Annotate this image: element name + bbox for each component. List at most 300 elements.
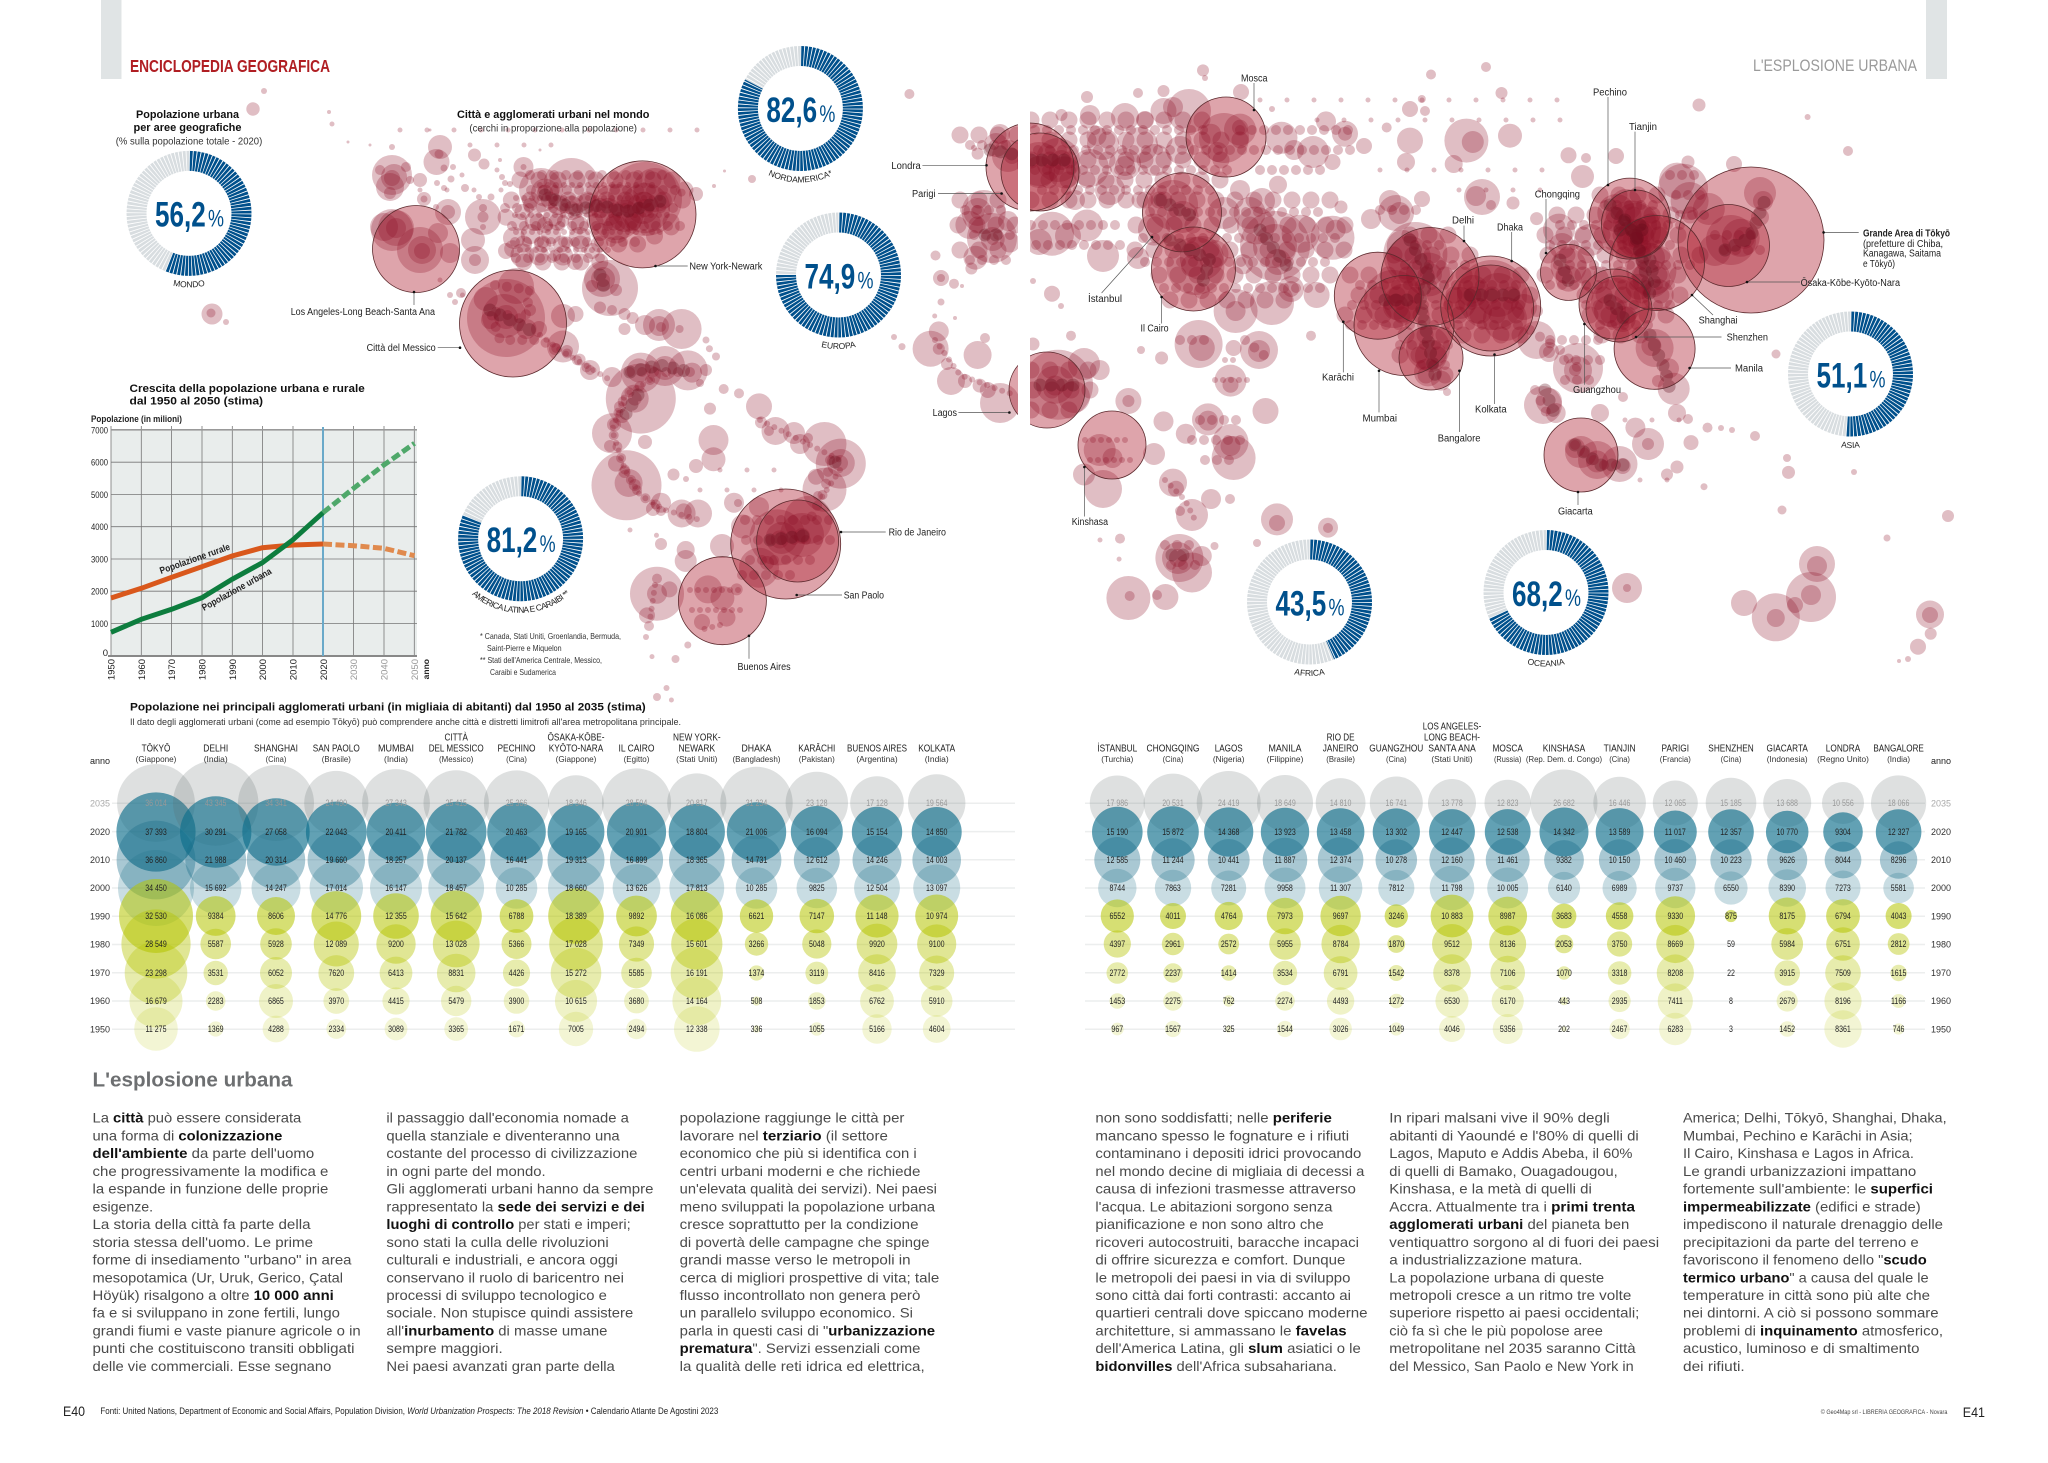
article heading: L'esplosione urbana [92,1070,293,1092]
column: Los Angeles-Long Beach-Santa Ana [1423,722,1481,1042]
header: Enciclopedia Geografica: ENCICLOPEDIA GEOGRAFICA [130,56,330,76]
y axis labels: 5000 [91,490,108,501]
text block: column 2: sempre maggiori. [386,1340,503,1356]
column: San Paolo [304,744,368,1039]
column: Giacarta: GIACARTA [1767,744,1808,754]
column: Londra: LONDRA [1826,744,1860,754]
credit footer: © Geo4Map srl - LIBRERIA GEOGRAFICA - Novara [1821,1408,1948,1416]
heading: Città e agglomerati urbani nel mondo: Città e agglomerati urbani nel mondo [457,109,650,121]
x axis labels: 2010 [288,659,300,680]
column: Pechino [484,744,549,1037]
label: Delhi [1452,216,1474,242]
y axis labels: 6000 [91,458,108,469]
chart title [130,383,365,408]
donut: Oceania 68,2% [1484,530,1608,666]
column: İstanbul: 6552 [1109,911,1126,921]
label: Kinshasa [1072,466,1108,528]
column: Città del Messico: 3365 [448,1024,465,1034]
column: Shanghai [238,744,314,1042]
text block: column 4: l'acqua. Le abitazioni sorgono senza [1095,1198,1333,1214]
column: Karāchi: 1853 [809,996,825,1006]
column: Manila: 13 923 [1274,827,1296,837]
text block: column 1 [92,1110,361,1374]
label: Grande Area di Tōkyō: Kanagawa, Saitama [1863,248,1941,260]
year axis: left: 2035 [90,798,110,808]
column: Londra: 9304 [1835,827,1851,837]
column: Chongqing: 2275 [1165,996,1181,1006]
text block: column 2: quella stanziale e diventeranno una [386,1127,620,1143]
column: Delhi: 30 291 [205,827,227,837]
column: Delhi: 2283 [208,996,224,1006]
text block: column 5: di quelli di Bamako, Ouagadougou, [1389,1163,1618,1179]
year axis: left: 1970 [90,968,110,978]
column: Chongqing: 15 872 [1162,827,1184,837]
column: Shenzhen: 59 [1727,939,1735,949]
text block: column 1: una forma di colonizzazione [92,1127,283,1143]
label: Il Cairo: Il Cairo [1140,324,1169,334]
column: İstanbul: 1453 [1109,996,1126,1006]
column: Buenos Aires: 15 154 [866,827,888,837]
column: Shanghai: 6052 [268,968,284,978]
column: Tōkyō: 32 530 [145,911,167,921]
column: Tianjin: 2467 [1612,1024,1628,1034]
page gutter [1018,0,1030,700]
column: Il Cairo: 16 899 [626,855,648,865]
column: Buenos Aires: 17 128 [866,798,888,808]
column: Parigi: 6283 [1667,1024,1684,1034]
column: Mosca: 11 461 [1497,855,1519,865]
footnotes: * Canada, Stati Uniti, Groenlandia, Bermuda, [480,631,621,641]
column: Shanghai: (Cina) [266,754,286,764]
column: San Paolo: (Brasile) [322,754,351,764]
column: San Paolo: 24 490 [326,798,348,808]
y axis labels [91,426,108,659]
column: Tianjin [1593,744,1646,1039]
line chart: urban and rural population growth [91,383,431,680]
column: Shenzhen: (Cina) [1721,754,1741,764]
column: Manila: 1544 [1277,1024,1293,1034]
column: Mumbai: 3089 [388,1024,404,1034]
label: Il Cairo [1140,296,1169,334]
column: Los Angeles-Long Beach-Santa Ana: 13 778 [1441,798,1463,808]
column: Kinshasa: 9382 [1556,855,1572,865]
heading: Popolazione urbana per aree geografiche [116,109,262,148]
text block: column 1: grandi fiumi e vaste pianure agricole o in [92,1322,361,1338]
column: Guangzhou: GUANGZHOU [1369,744,1423,754]
column: Manila: 7973 [1277,911,1293,921]
year axis: right [1931,756,1951,1034]
column: San Paolo: 22 043 [326,827,348,837]
column: Ōsaka-Kōbe-Kyōto-Nara: 7005 [568,1024,584,1034]
text block: column 3 [680,1110,940,1374]
plot background [111,430,417,656]
label: Giacarta [1558,491,1593,518]
x axis labels: 1950 [106,659,118,680]
column: Dhaka: (Bangladesh) [732,754,781,764]
column: Kolkata: 14 003 [926,855,948,865]
text block: column 1: esigenze. [92,1198,153,1214]
year axis: right: 1970 [1931,968,1951,978]
label: Lagos [933,408,1011,419]
text block: column 5: metropoli cresce a un ritmo tre volte [1389,1287,1632,1303]
column: Buenos Aires: 11 148 [867,911,888,921]
label: Chongqing: Chongqing [1535,190,1580,200]
column: Shenzhen: 6550 [1723,883,1739,893]
column: Città del Messico: 5479 [448,996,465,1006]
year axis: left: 2010 [90,855,110,865]
column: Kinshasa: (Rep. Dem. d. Congo) [1526,754,1602,764]
year axis: left: 2000 [90,883,110,893]
donut: Mondo 56,2%: % [208,206,224,233]
text block: column 3: grandi masse verso le metropoli in [680,1252,911,1268]
column: New York-Newark: 20 817 [686,798,708,808]
heading: table title: Il dato degli agglomerati urbani (come ad esempio Tōkyō) può comprendere anche città e distretti limitrofi all'area metropolitana principale. [130,717,681,727]
column: Città del Messico: 25 415 [445,798,467,808]
column: Londra: 7509 [1835,968,1851,978]
label: Parigi [912,189,1003,200]
text block: column 5: agglomerati urbani del pianeta ben [1389,1216,1629,1232]
header tab: right [1926,0,1947,79]
column: Parigi [1653,744,1698,1045]
cluster: South Asia [1364,222,1543,396]
text block: column 3: parla in questi casi di " urbanizzazione [680,1322,935,1338]
column: Ōsaka-Kōbe-Kyōto-Nara: 10 615 [565,996,587,1006]
column: Parigi: 11 017 [1665,827,1686,837]
column: Tianjin: 13 589 [1609,827,1631,837]
x axis labels: 2040 [380,659,390,680]
column: Tōkyō: 37 393 [145,827,167,837]
label: Londra: Londra [891,161,921,172]
column: Mumbai: 16 147 [385,883,407,893]
text block: column 4: bidonvilles dell'Africa subsahariana. [1095,1358,1337,1374]
column: İstanbul: 15 190 [1107,827,1129,837]
column: Ōsaka-Kōbe-Kyōto-Nara: 19 165 [565,827,587,837]
column: Guangzhou: 1542 [1388,968,1405,978]
text block: column 3: un parallelo sviluppo economico. Si [680,1305,913,1321]
column: Pechino: 3900 [509,996,525,1006]
x axis labels: 1970 [167,659,178,680]
column: Lagos: LAGOS [1215,744,1243,754]
column: Manila: 11 887 [1275,855,1296,865]
column: Mumbai: 12 355 [385,911,407,921]
x axis labels: 2050 [410,659,421,680]
column: Mosca: 5356 [1500,1024,1516,1034]
column: Delhi: 5587 [208,939,224,949]
column: New York-Newark: 16 191 [686,968,708,978]
column: Shenzhen: SHENZHEN [1708,744,1754,754]
column: Bangalore: 5581 [1891,883,1907,893]
column: Karāchi: KARĀCHI [798,742,835,754]
column: Città del Messico: 15 642 [445,911,467,921]
column: Mosca: 8987 [1500,911,1516,921]
column: Chongqing: 7863 [1165,883,1181,893]
column: Kinshasa: 443 [1558,996,1570,1006]
donut: Oceania 68,2%: % [1565,585,1581,612]
column: Chongqing: 2237 [1165,968,1181,978]
column: Tōkyō: 34 450 [145,883,167,893]
column: Città del Messico [424,730,489,1041]
heading: Popolazione urbana per aree geografiche: (% sulla popolazione totale - 2020) [116,136,262,148]
label: Manila: Manila [1735,364,1763,374]
column: Kinshasa: 6140 [1556,883,1572,893]
column: Il Cairo: 3680 [629,996,645,1006]
label: Buenos Aires [738,634,791,673]
x axis labels: 1990 [228,659,239,680]
chart title: dal 1950 al 2050 (stima) [130,396,263,408]
year axis: left: 2020 [90,827,110,837]
column: Pechino: 10 285 [506,883,528,893]
cluster: North America east [498,158,756,360]
column: Shenzhen: 8 [1729,996,1733,1006]
column: Dhaka: DHAKA [742,744,772,754]
cluster: Europe west and west Africa [891,89,1024,423]
text block: column 3: centri urbani moderni e che richiede [680,1163,921,1179]
largest agglomerations outlines [372,97,1824,645]
column: Parigi: 9737 [1667,883,1684,893]
column: Parigi: 9330 [1667,911,1684,921]
column: Mumbai: 6413 [388,968,404,978]
column: Lagos: 325 [1223,1024,1235,1034]
label: Ōsaka-Kōbe-Kyōto-Nara: Ōsaka-Kōbe-Kyōto-Nara [1801,277,1900,289]
column: Shenzhen [1706,744,1756,1034]
column: Kolkata: 13 097 [926,883,948,893]
text block: column 1: La storia della città fa parte della [92,1216,311,1232]
column: Tianjin: 3750 [1612,939,1628,949]
column: Londra: 8044 [1835,855,1851,865]
column: Pechino: 4426 [509,968,525,978]
year axis: left: 1960 [90,996,110,1006]
column: Mumbai: MUMBAI [378,744,414,754]
column: New York-Newark: 18 804 [686,827,708,837]
column: Chongqing: 4011 [1165,911,1181,921]
cluster: Europe east and Russia [1017,62,1853,231]
column: Karāchi: 1055 [809,1024,825,1034]
text block: column 1: storia stessa dell'uomo. Le prime [92,1234,313,1250]
donut: Africa 43,5%: AFRICA [1294,669,1325,676]
column: Bangalore: 1166 [1891,996,1907,1006]
column: Guangzhou: 1272 [1388,996,1405,1006]
text block: column 6: termico urbano " a causa del quale le [1683,1269,1929,1285]
column: Manila: 3534 [1277,968,1293,978]
text block: column 6 [1683,1110,1947,1374]
column: Lagos: 4764 [1221,911,1237,921]
column: Los Angeles-Long Beach-Santa Ana: 10 883 [1441,911,1463,921]
column: Rio de Janeiro: 9697 [1333,911,1349,921]
text block: column 5: Accra. Attualmente tra i primi trenta [1389,1198,1635,1214]
column: Mosca: 7106 [1500,968,1516,978]
text block: column 6: problemi di inquinamento atmosferico, [1683,1322,1943,1338]
column: Pechino: 20 463 [506,827,528,837]
label: San Paolo [795,590,884,602]
column: Tianjin: 4558 [1612,911,1628,921]
text block: column 4: di offrire sicurezza e comfort. Dunque [1095,1252,1346,1268]
column: İstanbul: (Turchia) [1101,754,1133,764]
column: Kolkata: 4604 [929,1024,945,1034]
x axis labels [106,659,431,680]
column: Ōsaka-Kōbe-Kyōto-Nara: 19 313 [565,855,587,865]
text block: column 5: abitanti di Yaoundé e l'80% di quelli di [1389,1127,1639,1143]
label: Mumbai: Mumbai [1362,413,1397,424]
text block: column 3: lavorare nel terziario (il settore [680,1127,888,1143]
column: Lagos: 14 368 [1218,827,1240,837]
column: Kolkata: 19 564 [926,798,948,808]
column: Ōsaka-Kōbe-Kyōto-Nara: KYŌTO-NARA [549,742,603,754]
label: Mumbai [1362,370,1397,424]
column: Manila: (Filippine) [1267,754,1303,764]
column: Tōkyō: 11 275 [146,1024,167,1034]
label: Chongqing [1535,190,1580,254]
column: Lagos: 1414 [1221,968,1237,978]
label: New York-Newark: New York-Newark [689,262,763,272]
year axis: right: 2035 [1931,798,1951,808]
column: İstanbul: 17 986 [1107,798,1129,808]
column: Shenzhen: 10 223 [1720,855,1742,865]
column: Los Angeles-Long Beach-Santa Ana: 8378 [1444,968,1460,978]
column: Tianjin: 16 446 [1609,798,1631,808]
text block: column 2: conservano il ruolo di baricentro nei [386,1269,624,1285]
column: Londra: 6751 [1835,939,1851,949]
column: Mosca [1484,744,1531,1044]
label: Grande Area di Tōkyō: (prefetture di Chiba, [1863,239,1943,250]
text block: column 1: punti che costituiscono transiti obbligati [92,1340,354,1356]
text block: column 2: il passaggio dall'economia nomade a [386,1110,629,1126]
column: Karāchi: (Pakistan) [799,754,835,764]
text block: column 5: Lagos, Maputo e Addis Abeba, il 60% [1389,1145,1632,1161]
donut: Asia 51,1% [1788,312,1913,448]
column: San Paolo: 7620 [328,968,345,978]
label: Shenzhen [1635,332,1768,344]
column: Kinshasa: 2053 [1556,939,1572,949]
column: Pechino: 16 441 [506,855,528,865]
column: San Paolo: 17 014 [326,883,348,893]
text block: column 2: Nei paesi avanzati gran parte della [386,1358,615,1374]
label: Grande Area di Tōkyō: Grande Area di Tōkyō [1863,228,1950,240]
column: Ōsaka-Kōbe-Kyōto-Nara: 18 660 [565,883,587,893]
text block: column 2 [386,1110,654,1374]
column: San Paolo: 3970 [328,996,345,1006]
column: Londra: 8361 [1835,1024,1851,1034]
column: Ōsaka-Kōbe-Kyōto-Nara: 18 346 [565,798,587,808]
label: Mosca [1241,74,1268,111]
column: Città del Messico: 20 137 [445,855,467,865]
column: Karāchi [786,742,848,1036]
column: Città del Messico: CITTÀ [444,730,468,744]
text block: column 6: Mumbai, Pechino e Karāchi in Asia; [1683,1127,1913,1143]
donut: Africa 43,5%: 43,5 [1276,584,1326,623]
label: Delhi: Delhi [1452,216,1474,226]
label: Guangzhou [1573,323,1621,396]
column: Los Angeles-Long Beach-Santa Ana: (Stati Uniti) [1431,754,1473,764]
column: Lagos: 7281 [1221,883,1237,893]
column: Guangzhou: 1049 [1388,1024,1405,1034]
text block: column 4 [1095,1110,1368,1374]
label: Pechino [1593,88,1627,186]
column: Ōsaka-Kōbe-Kyōto-Nara: 17 028 [565,939,587,949]
column: Mumbai: 27 343 [385,798,407,808]
column: Shenzhen: 3 [1729,1024,1733,1034]
label: Karāchi: Karāchi [1322,372,1354,384]
column: New York-Newark: 15 601 [686,939,708,949]
column: Città del Messico: 13 028 [445,939,467,949]
text block: column 6: fortemente sull'ambiente: le superfici [1683,1181,1933,1197]
column: Rio de Janeiro: RIO DE [1327,732,1355,744]
y axis labels: 7000 [91,426,108,436]
text block: column 3: la qualità delle reti idrica ed elettrica, [680,1358,925,1374]
column: Karāchi: 9825 [809,883,825,893]
column: New York-Newark [667,732,726,1052]
column: İstanbul: 8744 [1109,883,1126,893]
column: Dhaka: 21 006 [746,827,768,837]
column: Manila: 18 649 [1274,798,1296,808]
column: Buenos Aires: 6762 [869,996,885,1006]
largest agglomerations filled circles [372,97,1824,645]
label: Rio de Janeiro [840,528,946,538]
column: Los Angeles-Long Beach-Santa Ana: LONG BEACH- [1424,732,1480,744]
column: Tianjin: (Cina) [1609,754,1630,764]
column: Tōkyō: TŌKYŌ [142,742,170,754]
column: Shenzhen: 12 357 [1720,827,1742,837]
dense small-city dots: Europe and Africa [935,120,1350,565]
column: Shanghai: 5928 [268,939,284,949]
y axis labels: 3000 [91,554,108,566]
text block: column 5: del Messico, San Paolo e New York in [1389,1358,1634,1374]
column: Dhaka: 1374 [749,968,765,978]
label: Bangalore [1438,370,1481,444]
column: Guangzhou: 10 278 [1386,855,1408,865]
column: Londra: 8196 [1835,996,1851,1006]
column: İstanbul: 4397 [1109,939,1126,949]
column: Karāchi: 23 128 [806,798,828,808]
label: Tianjin: Tianjin [1629,122,1657,133]
text block: column 6: temperature in città sono più alte che [1683,1287,1930,1303]
column: Los Angeles-Long Beach-Santa Ana: 12 447 [1441,827,1463,837]
column: Tōkyō: 23 298 [145,968,167,978]
column: Buenos Aires: 8416 [869,968,885,978]
column: Lagos: 2572 [1221,939,1237,949]
text block: column 4: causa di infezioni trasmesse attraverso [1095,1181,1356,1197]
column: Ōsaka-Kōbe-Kyōto-Nara: (Giappone) [556,754,596,764]
text block: column 3: flusso incontrollato non genera però [680,1287,921,1303]
column: Parigi: 12 065 [1665,798,1687,808]
donut: Mondo 56,2%: 56,2 [155,196,206,235]
column: Giacarta: 2679 [1779,996,1796,1006]
table rows guide lines [112,803,1925,1029]
column: Dhaka: 3266 [749,939,765,949]
column: Rio de Janeiro: 13 458 [1330,827,1352,837]
column: Kolkata: 14 850 [926,827,948,837]
donut: Europa 74,9%: EUROPA [822,341,856,350]
text block: column 4: le metropoli dei paesi in via di sviluppo [1095,1269,1351,1285]
text block: column 6: favoriscono il fenomeno dello " scudo [1683,1252,1927,1268]
column: Shanghai: 34 341 [265,798,287,808]
label: Grande Area di Tōkyō: e Tōkyō) [1863,259,1895,270]
column: Bangalore: 746 [1893,1024,1905,1034]
column: Giacarta: (Indonesia) [1767,754,1808,764]
text block: column 1: dell'ambiente da parte dell'uomo [92,1145,314,1161]
column: Tianjin: 2935 [1612,996,1628,1006]
column: Chongqing: 2961 [1165,939,1181,949]
column: Rio de Janeiro: 12 374 [1330,855,1352,865]
x axis labels: 1960 [137,659,148,680]
cluster: Middle East and north Africa [1026,180,1354,333]
column: Parigi: 10 460 [1665,855,1687,865]
column: New York-Newark: 14 164 [686,996,708,1006]
axis title: Popolazione (in milioni) [91,414,182,425]
column: Delhi: DELHI [203,744,228,754]
column: Dhaka: 336 [751,1024,763,1034]
column: Tōkyō: 28 549 [145,939,167,949]
column: Pechino: PECHINO [498,744,536,754]
